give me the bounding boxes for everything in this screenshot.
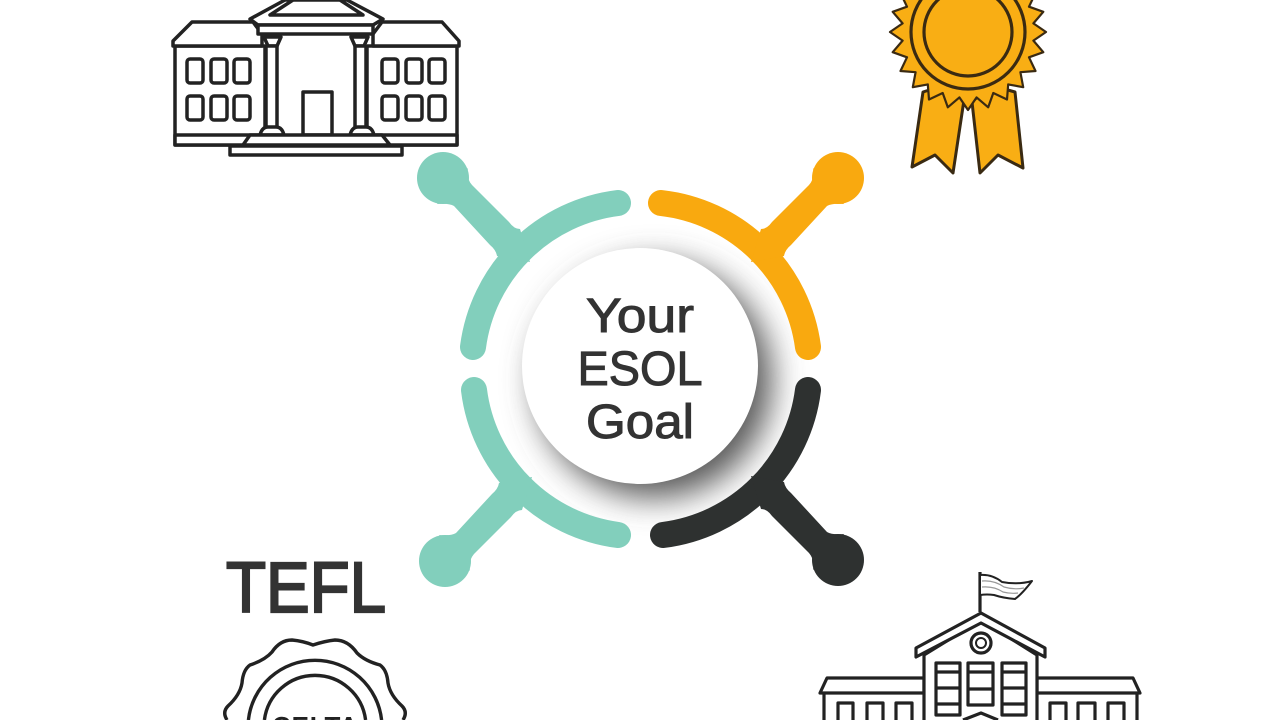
icon: CELTA seal [225, 640, 405, 720]
hub title: Your [586, 290, 694, 343]
icon: gold award rosette [890, 0, 1046, 173]
left ribbon [912, 85, 964, 173]
teal top-left connector [417, 152, 618, 347]
hub title: ESOL [578, 343, 702, 396]
windows [187, 59, 445, 120]
central hub diagram [417, 152, 864, 587]
dark bottom-right connector [663, 390, 864, 586]
right ribbon [972, 85, 1023, 173]
medal [890, 0, 1046, 110]
door canopy [963, 713, 998, 720]
pediment [250, 0, 383, 25]
wings [820, 678, 1140, 720]
hub circle [522, 248, 758, 484]
steps [230, 135, 402, 155]
wing windows [838, 703, 1124, 720]
right wing [367, 22, 459, 145]
central portico [258, 25, 374, 135]
icon: school building [820, 572, 1140, 720]
hub title [578, 290, 702, 449]
teal bottom-left connector [419, 390, 618, 587]
icon: university building [173, 0, 459, 155]
tall windows [936, 663, 1026, 715]
TEFL heading: TEFL [226, 549, 386, 628]
main block [916, 613, 1045, 720]
amber top-right connector [661, 152, 864, 347]
hub shadow [536, 262, 772, 498]
hub title: Goal [586, 396, 694, 449]
left wing [173, 22, 265, 145]
flag [980, 572, 1032, 612]
